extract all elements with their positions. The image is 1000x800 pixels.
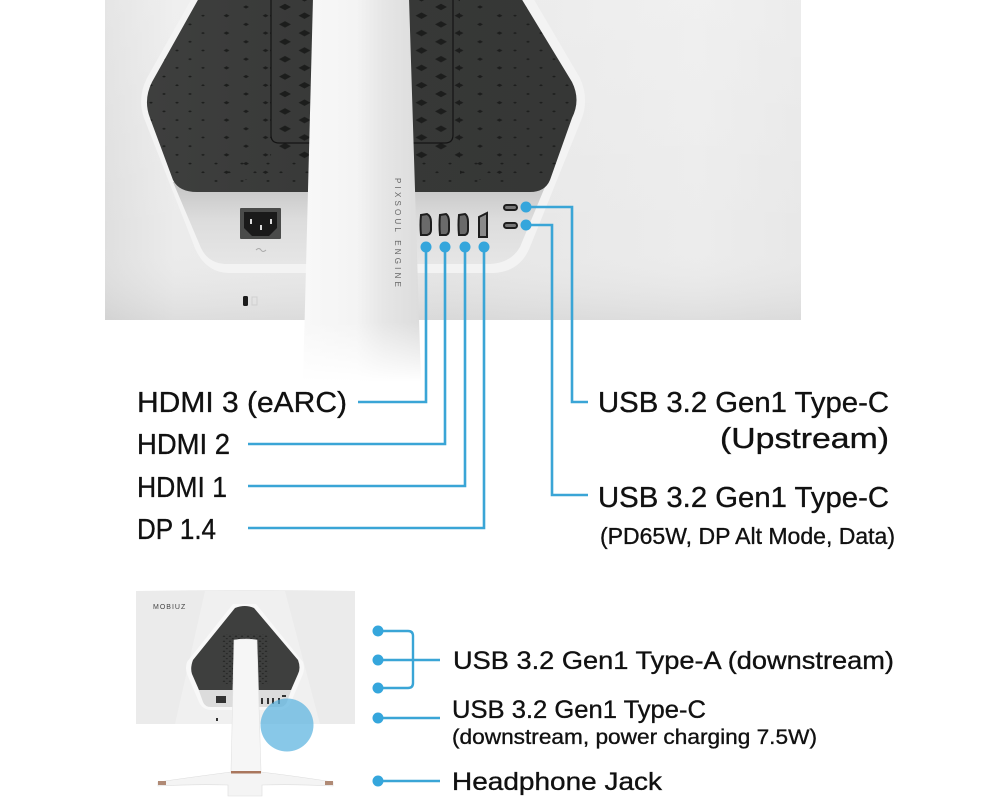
label: headphone jack: Headphone Jack xyxy=(452,768,663,796)
VESA recess outline xyxy=(271,0,453,143)
label: USB-A: USB 3.2 Gen1 Type-A (downstream) xyxy=(453,647,894,675)
stand column xyxy=(298,0,426,382)
labels: left ports xyxy=(137,387,347,546)
label: USB-C upstream: USB 3.2 Gen1 Type-C xyxy=(598,387,889,419)
callout dots xyxy=(372,626,384,786)
label: DP 1.4: DP 1.4 xyxy=(137,514,216,546)
thumbnail dark module xyxy=(191,606,300,690)
ports: HDMI and DP xyxy=(420,213,487,237)
thumbnail stand xyxy=(231,639,261,772)
white bezel around rear module xyxy=(141,0,585,273)
port tray xyxy=(173,182,547,264)
thumbnail bezel xyxy=(186,604,304,710)
label: HDMI 1: HDMI 1 xyxy=(137,472,227,504)
highlight circle xyxy=(260,698,314,752)
line: USB-C alt mode xyxy=(526,225,588,495)
label: USB-C downstream: (downstream, power charging 7.5W) xyxy=(452,726,817,749)
panel: monitor rear close-up xyxy=(105,0,801,382)
bracket lines xyxy=(378,631,440,781)
labels: right ports: (Upstream) xyxy=(720,423,889,455)
label: USB-C downstream xyxy=(452,696,817,749)
brand text on stand: PIXSOUL ENGINE xyxy=(393,178,402,290)
label: HDMI 3: HDMI 3 (eARC) xyxy=(137,387,347,419)
panel: full monitor thumbnail xyxy=(136,590,355,796)
connector diagram infographic xyxy=(105,0,894,796)
icon: kensington lock xyxy=(243,296,257,306)
label: HDMI 2: HDMI 2 xyxy=(137,429,230,461)
callout lines: main ports xyxy=(248,207,588,528)
line: DP xyxy=(248,247,484,528)
labels: right ports: (PD65W, DP Alt Mode, Data) xyxy=(600,523,895,549)
callout dots: main ports xyxy=(420,202,532,252)
label: USB-C downstream: USB 3.2 Gen1 Type-C xyxy=(452,696,706,724)
label: USB-C alt mode: USB 3.2 Gen1 Type-C xyxy=(598,482,889,514)
thumbnail screen back xyxy=(136,590,355,724)
line: HDMI 3 xyxy=(358,247,426,402)
monitor back shell xyxy=(105,0,801,320)
thumbnail ports xyxy=(216,695,286,721)
thumbnail brand: MOBIUZ xyxy=(153,604,186,611)
thumbnail base xyxy=(158,771,333,796)
dark vented rear module xyxy=(145,0,580,192)
line: HDMI 2 xyxy=(248,247,445,444)
ports: USB-C xyxy=(504,205,517,228)
thumbnail port tray xyxy=(198,688,292,707)
line: USB-C upstream xyxy=(526,207,588,402)
labels: right ports xyxy=(598,387,895,549)
icon: power socket xyxy=(240,208,281,252)
line: HDMI 1 xyxy=(248,247,465,486)
callouts: thumbnail ports xyxy=(372,626,440,786)
